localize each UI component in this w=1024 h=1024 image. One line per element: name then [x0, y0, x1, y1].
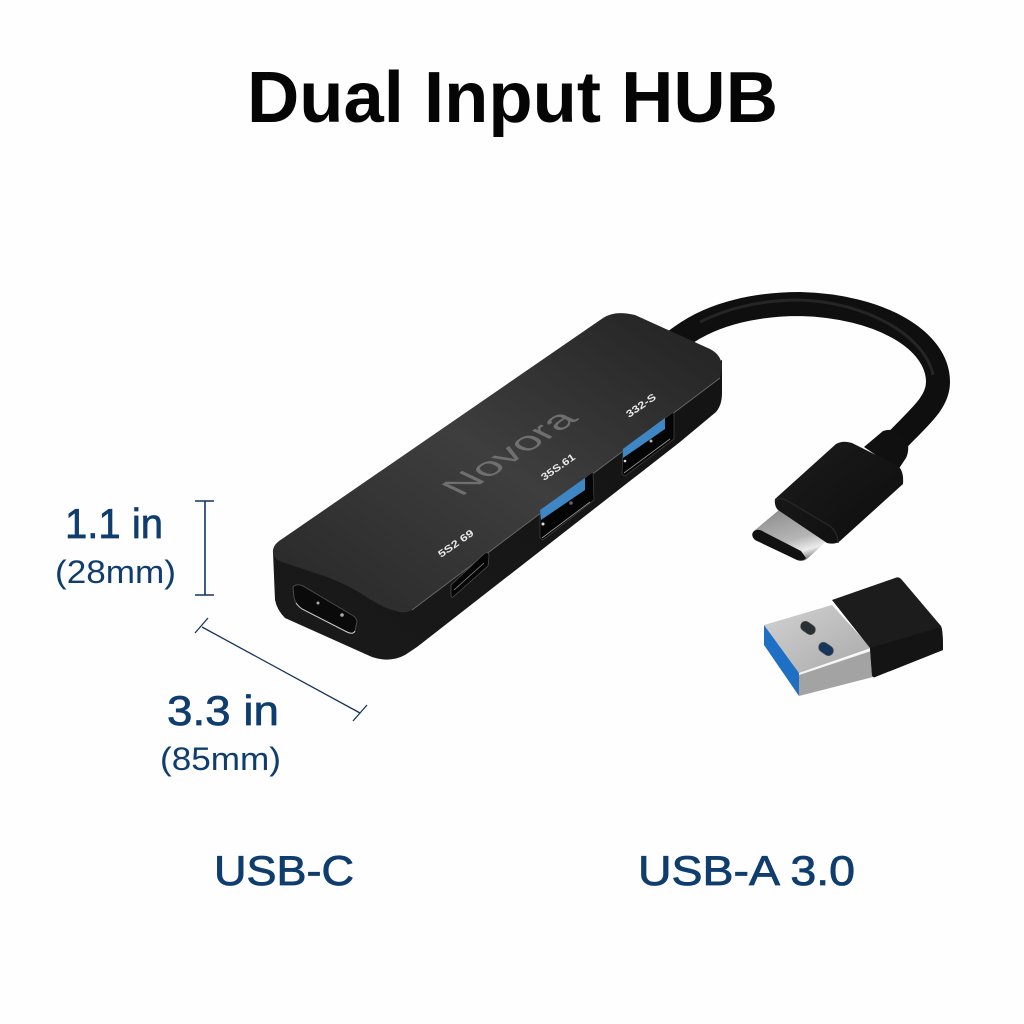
length value: 3.3 in: [167, 687, 279, 734]
USB-A metal front: [799, 651, 873, 696]
logo: Novora: Novora: [432, 405, 587, 501]
USB-C strain relief: [864, 430, 908, 470]
height dimension: [195, 501, 214, 595]
label: USB-A 3.0: USB-A 3.0: [638, 847, 855, 894]
hub top face: [273, 313, 722, 612]
length metric value: (85mm): [160, 741, 281, 777]
icon: hub cable: [655, 300, 938, 450]
title: Dual Input HUB: [247, 58, 778, 138]
label: USB-A port right: 332-S: [624, 392, 659, 420]
HDMI port: [293, 585, 357, 633]
hub side: [273, 360, 722, 660]
height metric value: (28mm): [55, 554, 176, 590]
USB-A black housing: [832, 577, 943, 677]
USB-A contact holes: [799, 619, 835, 658]
label: USB-C: USB-C: [214, 847, 354, 894]
USB-A metal top: [764, 605, 871, 673]
icon: USB-C connector: [752, 430, 908, 561]
USB-A port right: [622, 413, 674, 476]
icon: hub body: [273, 313, 722, 660]
USB-C plug opening: [752, 530, 806, 561]
label: USB-A port middle: 35S.61: [539, 452, 578, 483]
icon: USB-A adapter: [764, 577, 943, 696]
length dimension: [195, 618, 367, 721]
USB-C port: [451, 553, 489, 597]
label: USB-C port: 5S2 69: [436, 528, 477, 560]
USB-C metal plug: [753, 505, 832, 561]
USB-A blue tongue: [764, 625, 799, 696]
height value: 1.1 in: [65, 500, 163, 547]
USB-A port middle: [540, 472, 594, 540]
USB-C housing: [775, 442, 903, 544]
